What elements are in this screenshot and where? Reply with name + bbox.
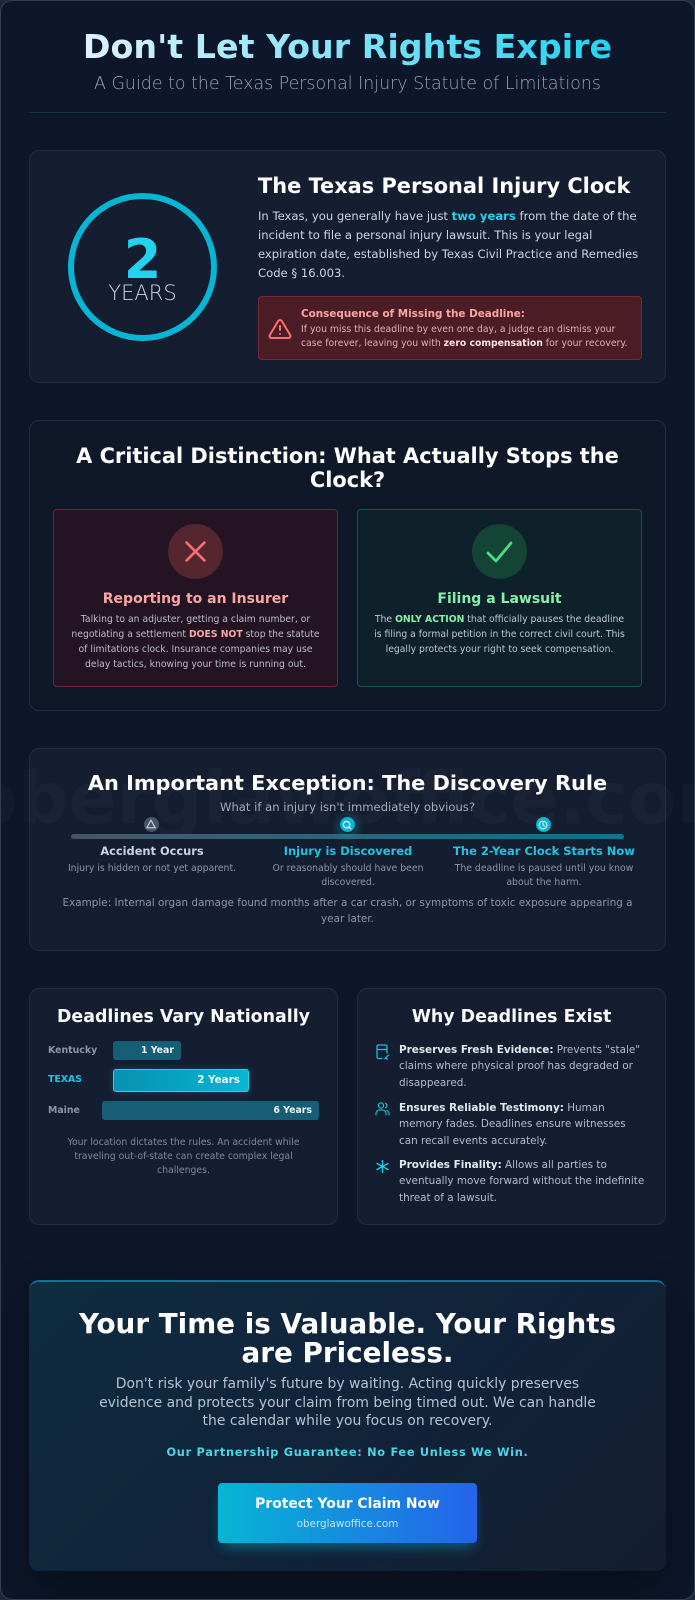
discovery example <box>62 897 632 925</box>
reason: finality <box>376 1159 644 1204</box>
callout text <box>301 308 627 349</box>
deadlines note: Your location dictates the rules. An accident while <box>68 1137 299 1148</box>
clock body: In Texas, you generally have just two years from the date of the <box>258 209 637 223</box>
callout: consequence <box>258 296 642 360</box>
insurer title: Reporting to an Insurer <box>103 591 288 607</box>
panel: why deadlines exist <box>357 988 666 1225</box>
panel: Texas personal injury clock <box>29 150 666 383</box>
step description <box>273 863 423 888</box>
timeline bar <box>71 834 624 839</box>
clock body <box>258 209 638 280</box>
icon: x in circle <box>168 524 223 579</box>
card: filing a lawsuit <box>357 509 642 687</box>
CTA body: Don't risk your family's future by waiting. Acting quickly preserves <box>116 1376 579 1392</box>
CTA button <box>218 1483 477 1543</box>
reason text: disappeared. <box>399 1077 467 1089</box>
reason text <box>399 1044 640 1089</box>
step: accident occurs <box>68 817 236 874</box>
callout text: If you miss this deadline by even one day, a judge can dismiss your <box>301 324 615 334</box>
step: clock starts <box>453 817 635 888</box>
CTA body <box>99 1376 596 1429</box>
insurer body: delay tactics, knowing your time is running out. <box>85 659 306 670</box>
reason: reliable testimony <box>375 1102 626 1147</box>
reason: fresh evidence <box>376 1044 640 1089</box>
step title: Accident Occurs <box>100 844 204 858</box>
icon: warning triangle <box>268 319 292 339</box>
deadlines note: traveling out-of-state can create complex legal <box>74 1151 293 1162</box>
distinction heading: Clock? <box>310 468 385 492</box>
insurer body: Talking to an adjuster, getting a claim number, or <box>81 614 310 625</box>
reason text: threat of a lawsuit. <box>399 1192 497 1204</box>
lawsuit body: is filing a formal petition in the correct civil court. This <box>374 629 625 640</box>
CTA body: the calendar while you focus on recovery. <box>203 1413 492 1429</box>
callout text: Consequence of Missing the Deadline: <box>301 308 525 320</box>
subtitle: A Guide to the Texas Personal Injury Statute of Limitations <box>94 74 601 94</box>
step description: discovered. <box>321 877 375 888</box>
discovery example: Example: Internal organ damage found months after a car crash, or symptoms of toxic exposure appearing a <box>62 897 632 909</box>
step description: about the harm. <box>506 877 582 888</box>
CTA heading: Your Time is Valuable. Your Rights <box>79 1307 616 1340</box>
panel: deadlines vary nationally <box>29 988 338 1225</box>
insurer body: negotiating a settlement DOES NOT stop the statute <box>71 629 320 640</box>
icon: magnifier <box>340 817 354 832</box>
reason text: Preserves Fresh Evidence: Prevents "stale" <box>399 1044 640 1056</box>
clock body: incident to file a personal injury lawsuit. This is your legal <box>258 228 592 242</box>
clock body: Code § 16.003. <box>258 266 345 280</box>
lawsuit body: legally protects your right to seek compensation. <box>386 644 613 655</box>
insurer body: of limitations clock. Insurance companies may use <box>79 644 312 655</box>
callout text: case forever, leaving you with zero compensation for your recovery. <box>301 338 627 349</box>
bar: Texas <box>48 1066 252 1095</box>
card: reporting to an insurer <box>53 509 338 687</box>
bar: Texas: 2 Years <box>197 1074 240 1086</box>
bar: Maine <box>48 1101 319 1120</box>
lawsuit body: The ONLY ACTION that officially pauses the deadline <box>375 614 624 625</box>
reason text: eventually move forward without the indefinite <box>399 1175 644 1187</box>
reason text: memory fades. Deadlines ensure witnesses <box>399 1118 626 1130</box>
panel: discovery rule <box>29 748 666 951</box>
bar: Texas: TEXAS <box>48 1074 82 1085</box>
header divider <box>29 112 666 113</box>
step description: Injury is hidden or not yet apparent. <box>68 863 236 874</box>
discovery example: year later. <box>321 913 374 925</box>
icon: people <box>375 1102 390 1116</box>
button url: oberglawoffice.com <box>297 1518 398 1530</box>
step title: Injury is Discovered <box>284 844 412 858</box>
number 2: 2 <box>124 228 161 291</box>
panel: critical distinction <box>29 420 666 711</box>
step description: The deadline is paused until you know <box>455 863 633 874</box>
icon: check in circle <box>472 524 527 579</box>
header <box>83 27 612 94</box>
2 years circle <box>68 193 217 341</box>
insurer body <box>71 614 320 670</box>
panel: call to action <box>29 1280 666 1571</box>
lawsuit body <box>374 614 625 655</box>
title: Don't Let Your Rights Expire <box>83 27 612 66</box>
button label: Protect Your Claim Now <box>255 1496 440 1512</box>
deadlines heading: Deadlines Vary Nationally <box>57 1007 310 1027</box>
reason text: can recall events accurately. <box>399 1135 547 1147</box>
bar: Kentucky: 1 Year <box>141 1045 174 1056</box>
distinction heading: A Critical Distinction: What Actually Stops the <box>76 444 619 468</box>
clock heading: The Texas Personal Injury Clock <box>258 174 630 198</box>
step description: Or reasonably should have been <box>273 863 423 874</box>
why heading: Why Deadlines Exist <box>412 1007 611 1027</box>
step: injury discovered <box>273 813 423 888</box>
deadlines note: challenges. <box>157 1165 210 1176</box>
reason text <box>399 1159 644 1204</box>
lawsuit title: Filing a Lawsuit <box>437 591 562 607</box>
icon: triangle <box>144 817 158 832</box>
distinction heading <box>76 444 619 492</box>
deadlines note <box>68 1137 299 1176</box>
reason text: Ensures Reliable Testimony: Human <box>399 1102 605 1114</box>
icon: asterisk <box>376 1160 389 1173</box>
discovery subtitle: What if an injury isn't immediately obvious? <box>220 800 475 814</box>
reason text: claims where physical proof has degraded or <box>399 1060 633 1072</box>
step description <box>454 863 633 888</box>
bar: Kentucky: Kentucky <box>48 1045 97 1056</box>
bar chart <box>48 1041 319 1120</box>
step title: The 2-Year Clock Starts Now <box>453 844 635 858</box>
clock body: expiration date, established by Texas Civil Practice and Remedies <box>258 247 638 261</box>
CTA heading <box>78 1307 616 1368</box>
bar: Kentucky <box>48 1041 181 1060</box>
CTA body: evidence and protects your claim from being timed out. We can handle <box>99 1395 596 1411</box>
reason text <box>399 1102 626 1147</box>
guarantee: Our Partnership Guarantee: No Fee Unless We Win. <box>166 1445 529 1459</box>
CTA heading: are Priceless. <box>242 1336 453 1368</box>
reason text: Provides Finality: Allows all parties to <box>399 1159 607 1171</box>
discovery heading: An Important Exception: The Discovery Rule <box>88 771 607 795</box>
bar: Maine: Maine <box>48 1105 80 1116</box>
bar: Maine: 6 Years <box>273 1105 312 1116</box>
icon: clock <box>536 817 550 832</box>
icon: file <box>376 1044 390 1060</box>
years label: YEARS <box>108 281 177 305</box>
